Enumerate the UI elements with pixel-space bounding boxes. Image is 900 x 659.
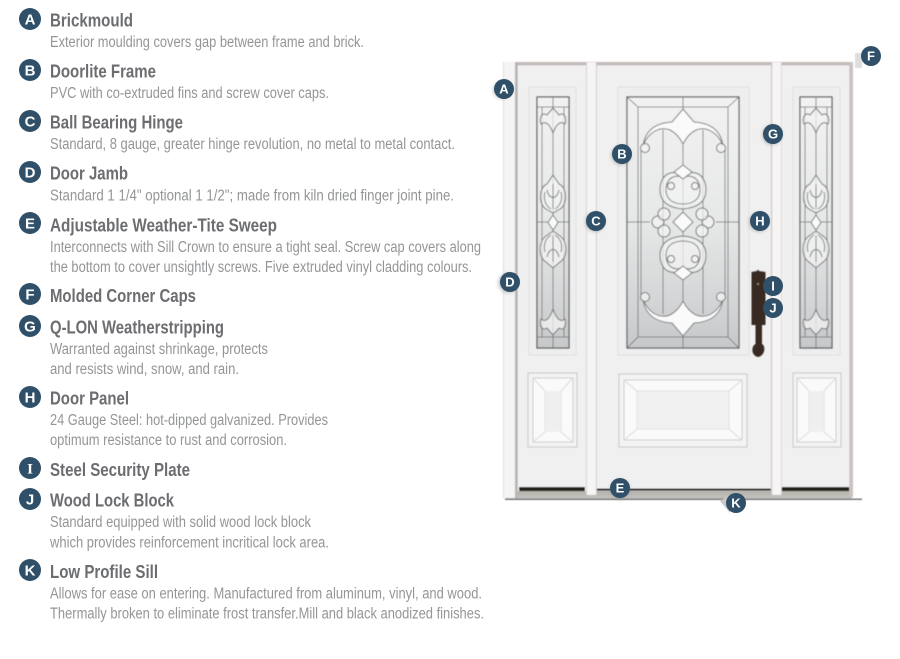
feature B: Doorlite Frame: B <box>25 62 36 80</box>
door handle set <box>752 270 766 357</box>
feature I: Steel Security Plate <box>19 457 190 480</box>
feature A: Brickmould: Brickmould <box>50 10 133 30</box>
marker K <box>720 493 746 513</box>
feature C: Ball Bearing Hinge: Ball Bearing Hinge <box>50 112 183 132</box>
marker J <box>763 298 783 318</box>
feature D: Door Jamb <box>19 161 454 204</box>
feature D: Door Jamb: D <box>25 164 36 182</box>
center motif <box>660 173 706 209</box>
feature E: Adjustable Weather-Tite Sweep: E <box>25 216 35 232</box>
feature G: Q-LON Weatherstripping: G <box>24 318 36 336</box>
feature K: Low Profile Sill <box>19 559 484 622</box>
marker G: G <box>768 126 778 142</box>
feature G: Q-LON Weatherstripping: Q-LON Weatherstripping <box>50 318 224 338</box>
marker D: D <box>505 274 515 290</box>
feature J: Wood Lock Block <box>19 488 329 552</box>
marker F <box>861 46 881 66</box>
marker F: F <box>867 48 875 64</box>
door illustration <box>493 46 881 513</box>
feature E: Adjustable Weather-Tite Sweep <box>19 212 481 276</box>
marker B: B <box>617 146 627 162</box>
feature C: Ball Bearing Hinge: Standard, 8 gauge, greater hinge revolution, no metal to metal contact. <box>50 136 455 153</box>
feature J: Wood Lock Block: which provides reinforcement incritical lock area. <box>49 534 329 552</box>
feature I: Steel Security Plate: I <box>27 462 33 478</box>
lower scroll arch <box>643 299 723 336</box>
right mullion <box>771 62 782 495</box>
feature B: Doorlite Frame: PVC with co-extruded fins and screw cover caps. <box>50 85 329 102</box>
left sidelite <box>518 66 586 491</box>
feature J: Wood Lock Block: Standard equipped with solid wood lock block <box>50 514 311 531</box>
features list <box>19 8 484 622</box>
marker E: E <box>616 480 625 496</box>
feature H: Door Panel: optimum resistance to rust and corrosion. <box>50 432 287 449</box>
marker H: H <box>755 214 765 228</box>
feature A: Brickmould: A <box>25 12 36 28</box>
door frame and sill <box>503 53 862 500</box>
marker C: C <box>591 214 601 228</box>
feature F: Molded Corner Caps <box>19 283 196 306</box>
feature K: Low Profile Sill: Thermally broken to eliminate frost transfer.Mill and black anodized finishes. <box>50 606 484 622</box>
right sidelite <box>782 66 849 491</box>
feature E: Adjustable Weather-Tite Sweep: Adjustable Weather-Tite Sweep <box>50 216 277 236</box>
feature H: Door Panel: 24 Gauge Steel: hot-dipped galvanized. Provides <box>50 412 328 429</box>
left mullion <box>586 62 597 495</box>
feature B: Doorlite Frame <box>19 59 329 102</box>
feature H: Door Panel <box>19 386 328 449</box>
feature J: Wood Lock Block: Wood Lock Block <box>50 490 175 510</box>
feature F: Molded Corner Caps: F <box>25 286 35 304</box>
marker K: K <box>731 496 741 510</box>
marker I <box>763 276 783 296</box>
marker D <box>498 272 520 293</box>
feature C: Ball Bearing Hinge: C <box>25 114 36 130</box>
marker A <box>493 79 514 99</box>
feature H: Door Panel: H <box>25 390 35 406</box>
feature G: Q-LON Weatherstripping <box>19 315 268 378</box>
main door leaded glass <box>627 97 739 348</box>
upper scroll arch <box>643 109 723 146</box>
feature A: Brickmould: Exterior moulding covers gap between frame and brick. <box>50 34 364 51</box>
feature I: Steel Security Plate: Steel Security Plate <box>50 460 190 480</box>
feature D: Door Jamb: Door Jamb <box>50 164 128 184</box>
feature G: Q-LON Weatherstripping: and resists wind, snow, and rain. <box>50 361 239 378</box>
right sidelite leaded glass <box>800 97 832 348</box>
feature B: Doorlite Frame: Doorlite Frame <box>50 62 156 82</box>
feature E: Adjustable Weather-Tite Sweep: the bottom to cover unsightly screws. Five extruded vinyl cladding colours. <box>50 259 472 276</box>
feature K: Low Profile Sill: Allows for ease on entering. Manufactured from aluminum, vinyl, and wood. <box>50 586 482 602</box>
marker E <box>610 478 630 499</box>
main door slab <box>597 66 771 491</box>
marker G <box>762 124 783 145</box>
marker H <box>749 211 770 232</box>
left sidelite leaded glass <box>537 97 569 348</box>
feature A: Brickmould <box>19 8 364 51</box>
feature C: Ball Bearing Hinge <box>19 110 455 153</box>
feature F: Molded Corner Caps: Molded Corner Caps <box>50 286 196 306</box>
feature J: Wood Lock Block: J <box>26 492 34 508</box>
feature E: Adjustable Weather-Tite Sweep: Interconnects with Sill Crown to ensure a tight seal. Screw cap covers along <box>50 239 481 256</box>
marker C <box>585 211 606 232</box>
feature G: Q-LON Weatherstripping: Warranted against shrinkage, protects <box>50 341 268 358</box>
feature K: Low Profile Sill: K <box>25 562 36 580</box>
marker J: J <box>769 300 777 316</box>
marker A: A <box>499 82 509 96</box>
marker B <box>611 144 632 165</box>
feature D: Door Jamb: Standard 1 1/4" optional 1 1/2"; made from kiln dried finger joint pine. <box>50 188 454 204</box>
feature K: Low Profile Sill: Low Profile Sill <box>50 562 158 582</box>
marker I: I <box>771 278 775 294</box>
feature H: Door Panel: Door Panel <box>50 388 129 408</box>
